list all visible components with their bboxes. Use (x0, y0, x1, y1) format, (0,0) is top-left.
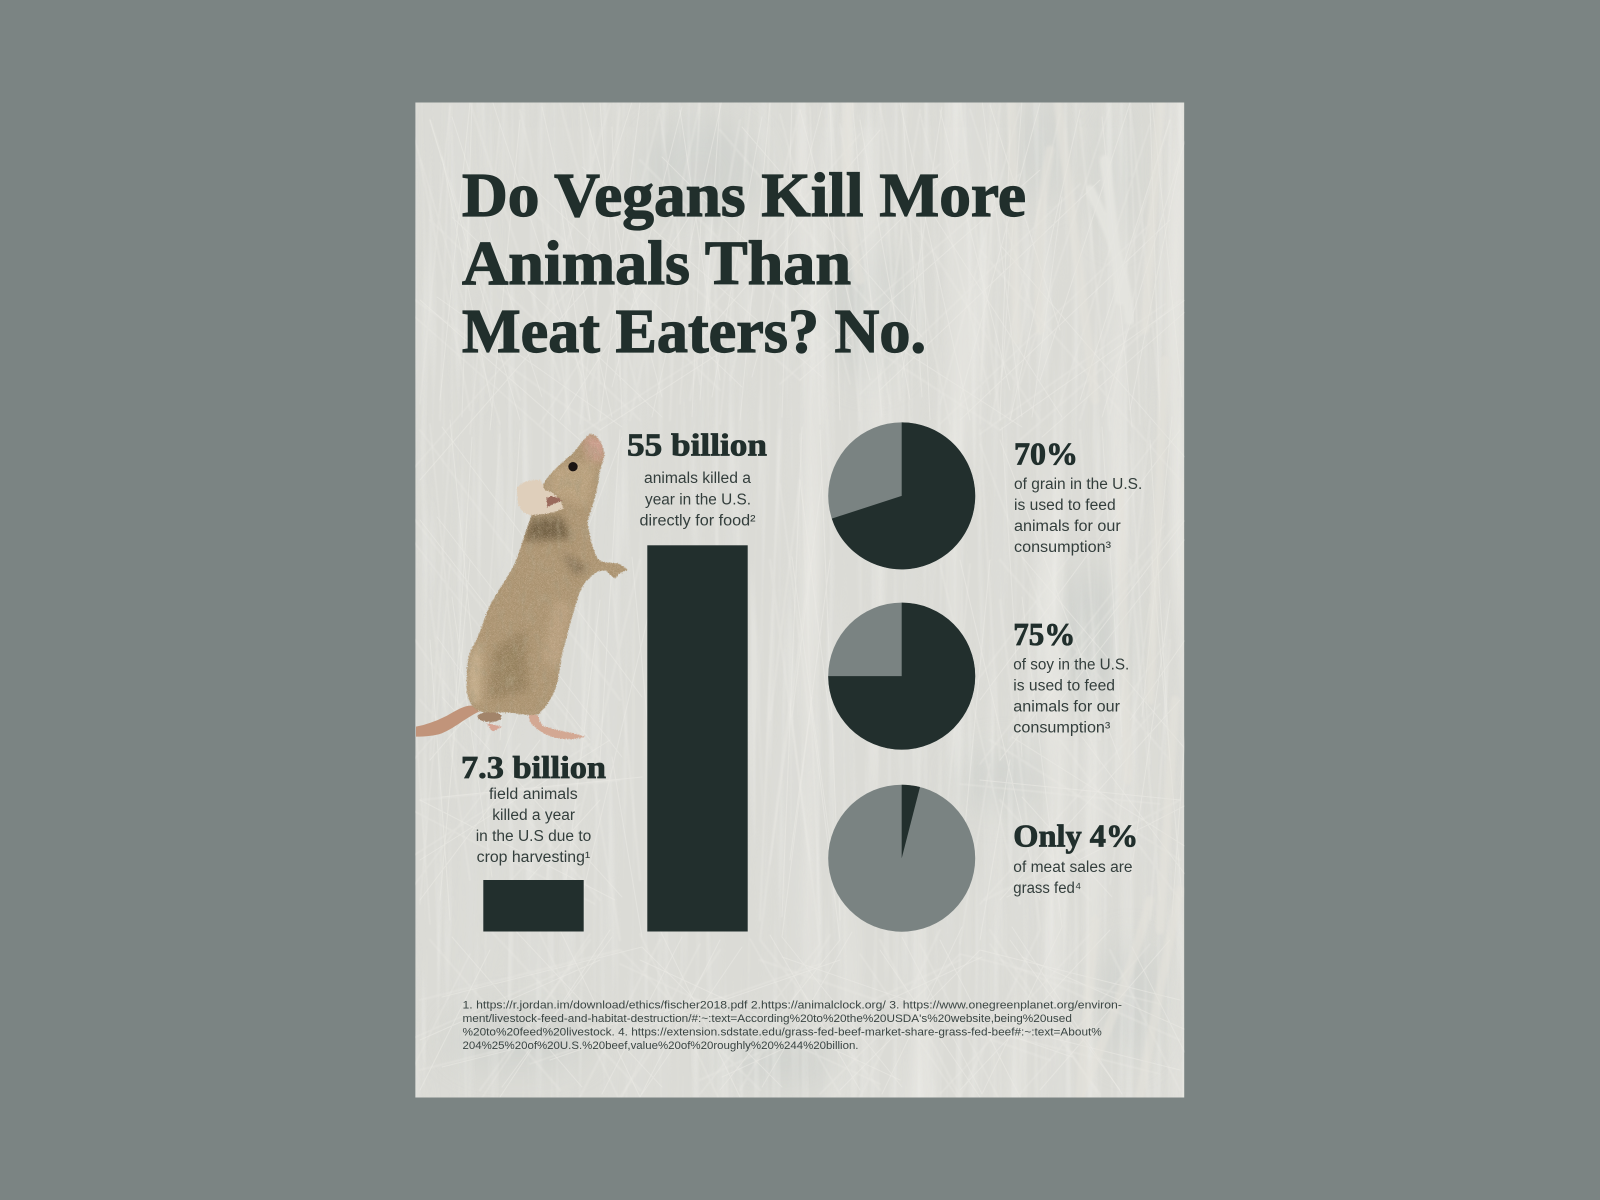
stat: 70%: is used to feed (1014, 497, 1116, 514)
stat: 70% (1014, 435, 1142, 556)
description: 7.3 billion: field animals (489, 786, 578, 803)
stat: 75%: 75% (1013, 616, 1075, 652)
footnotes (462, 999, 1122, 1052)
title: Do Vegans Kill More (462, 162, 1026, 230)
mouse ear (517, 480, 563, 515)
stat: 75% (1013, 616, 1129, 737)
description: 55 billion: animals killed a (644, 470, 751, 487)
stat: 75%: of soy in the U.S. (1013, 657, 1129, 674)
pie: 75% soy (828, 603, 975, 750)
stat: 55 billion: 55 billion (627, 426, 767, 462)
stat: 7.3 billion (461, 749, 606, 866)
description: 7.3 billion (476, 786, 591, 866)
title (462, 162, 1026, 366)
stat: 70%: animals for our (1014, 518, 1121, 535)
panel: poster (400, 100, 1202, 1101)
mouse feet (478, 712, 585, 739)
description: 7.3 billion: killed a year (492, 807, 575, 824)
footnotes: ment/livestock-feed-and-habitat-destruction/#:~:text=According%20to%20the%20USDA's%20website,being%20used (462, 1013, 1072, 1025)
bar: 7.3 billion (483, 880, 584, 932)
stat: 75%: consumption³ (1013, 720, 1110, 737)
title: Meat Eaters? No. (462, 298, 926, 366)
footnotes: 204%25%20of%20U.S.%20beef,value%20of%20roughly%20%244%20billion. (462, 1040, 858, 1052)
stat: 70%: 70% (1014, 435, 1078, 471)
bar: 55 billion (647, 545, 748, 932)
description: 7.3 billion: crop harvesting¹ (477, 849, 590, 866)
description: 55 billion: directly for food² (640, 512, 756, 529)
footnotes: %20to%20feed%20livestock. 4. https://extension.sdstate.edu/grass-fed-beef-market-share-grass-fed-beef#:~:text=About% (462, 1027, 1102, 1039)
pie: 70% grain (828, 422, 975, 569)
description: 55 billion: year in the U.S. (645, 491, 751, 508)
footnotes: 1. https://r.jordan.im/download/ethics/fischer2018.pdf 2.https://animalclock.org/ 3. https://www.onegreenplanet.org/environ- (462, 999, 1122, 1011)
stat: 75%: is used to feed (1013, 678, 1115, 695)
stat: 7.3 billion: 7.3 billion (461, 749, 606, 785)
title: Animals Than (462, 230, 851, 298)
mouse tail (416, 705, 479, 737)
stat: 70%: of grain in the U.S. (1014, 476, 1142, 493)
stat: 55 billion (627, 426, 767, 529)
stat: 75%: animals for our (1013, 699, 1120, 716)
stat: only 4%: of meat sales are (1013, 859, 1133, 876)
stat: 70%: consumption³ (1014, 539, 1111, 556)
pie: 4% grass fed (828, 785, 975, 932)
description: 7.3 billion: in the U.S due to (476, 828, 591, 845)
mouse body (466, 433, 628, 716)
stat: only 4%: Only 4% (1013, 818, 1138, 854)
image: mouse (416, 425, 635, 739)
stat: only 4%: grass fed⁴ (1013, 880, 1081, 897)
stat: only 4% (1013, 818, 1138, 897)
mouse eye (568, 462, 578, 471)
description: 55 billion (640, 470, 756, 529)
